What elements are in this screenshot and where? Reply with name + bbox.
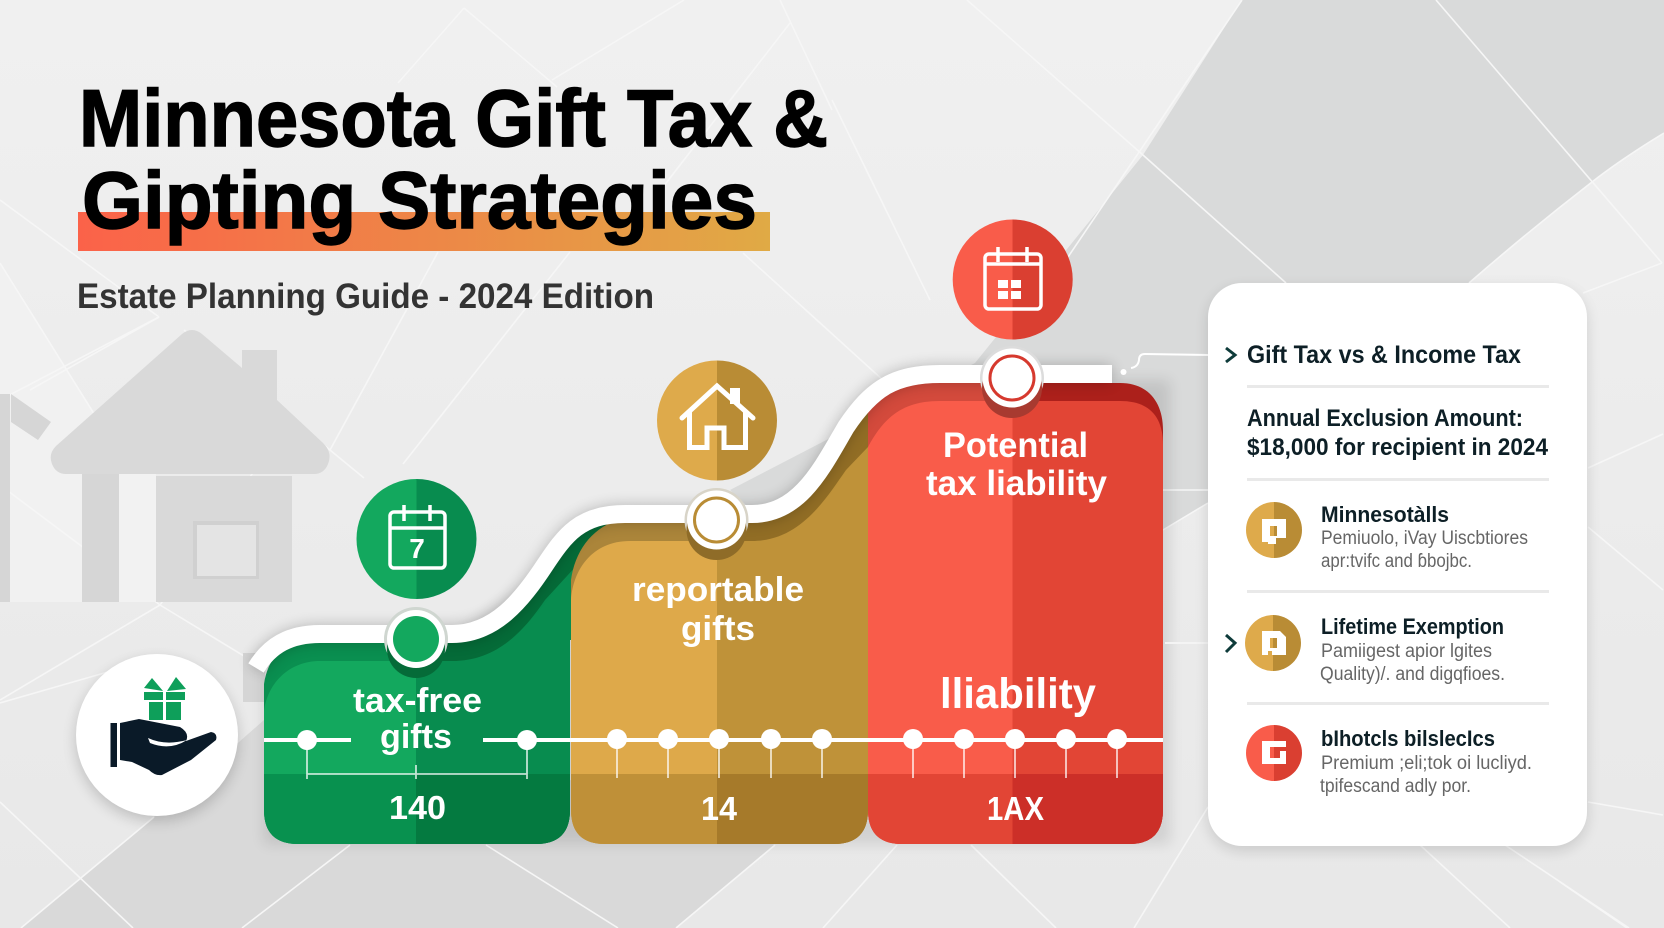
item 3: Premium ;eli;tok oi lucliyd. xyxy=(1321,753,1532,774)
item 2: Pamiigest apior lgites xyxy=(1321,641,1492,662)
block labels: tax-free xyxy=(353,682,482,720)
block: reportable gifts xyxy=(565,400,875,854)
block labels: reportable xyxy=(632,571,804,609)
node: green xyxy=(384,607,448,678)
block labels xyxy=(353,426,1108,827)
annual exclusion text xyxy=(1247,405,1549,461)
block: potential tax liability xyxy=(860,370,1170,854)
item 3 xyxy=(1246,725,1532,797)
connector to panel xyxy=(1120,354,1225,643)
item 3: tpifescand adly por. xyxy=(1320,776,1471,797)
node: red xyxy=(980,346,1044,418)
panel heading: Gift Tax vs & Income Tax xyxy=(1247,341,1521,369)
icon: green calendar: 7 xyxy=(409,533,425,564)
block: tax-free gifts xyxy=(264,524,607,844)
icon: gold house xyxy=(657,360,777,480)
title xyxy=(78,74,828,251)
item 2: Lifetime Exemption xyxy=(1321,614,1504,639)
stepped area chart xyxy=(256,346,1225,854)
house watermark xyxy=(0,330,330,702)
item 1: Minnesotàlls xyxy=(1321,502,1449,527)
title line 1: Minnesota Gift Tax & xyxy=(79,74,828,164)
block labels: gifts xyxy=(681,610,755,648)
block labels: lliability xyxy=(940,670,1096,718)
block labels: gifts xyxy=(380,718,452,756)
item 1: apr:tvifc and ɓbojbc. xyxy=(1321,551,1472,572)
block shadows xyxy=(264,380,1170,844)
panel arrow 1 xyxy=(1226,348,1235,362)
block labels: 14 xyxy=(701,790,738,827)
block labels: 140 xyxy=(389,789,446,826)
icon: green calendar xyxy=(356,479,476,599)
item 2: Quality)/. and digqfioes. xyxy=(1320,664,1505,685)
item 2 xyxy=(1245,614,1505,685)
node: gold xyxy=(684,488,748,560)
annual exclusion text: Annual Exclusion Amount: xyxy=(1247,405,1523,432)
rising white path xyxy=(256,374,1112,668)
block labels: tax liability xyxy=(926,464,1108,503)
panel: gift tax details xyxy=(1208,283,1587,851)
title highlight bar xyxy=(78,212,770,251)
subtitle: Estate Planning Guide - 2024 Edition xyxy=(77,277,654,316)
item 1: Pemiuolo, iVay Uiscbtiores xyxy=(1321,528,1528,549)
gift box xyxy=(144,677,186,720)
annual exclusion text: $18,000 for recipient in 2024 xyxy=(1247,434,1549,461)
block labels: 1AX xyxy=(987,790,1044,827)
hand xyxy=(110,719,216,775)
block labels: Potential xyxy=(943,426,1088,465)
item 1 xyxy=(1246,502,1528,572)
timeline xyxy=(264,729,1163,779)
title line 2: Gipting Strategies xyxy=(82,156,757,246)
icon: red calendar xyxy=(953,220,1073,340)
panel arrow 2 xyxy=(1226,635,1235,652)
item 3: bIhotcls bilslecIcs xyxy=(1321,726,1495,751)
icon: hand with gift xyxy=(76,654,238,821)
